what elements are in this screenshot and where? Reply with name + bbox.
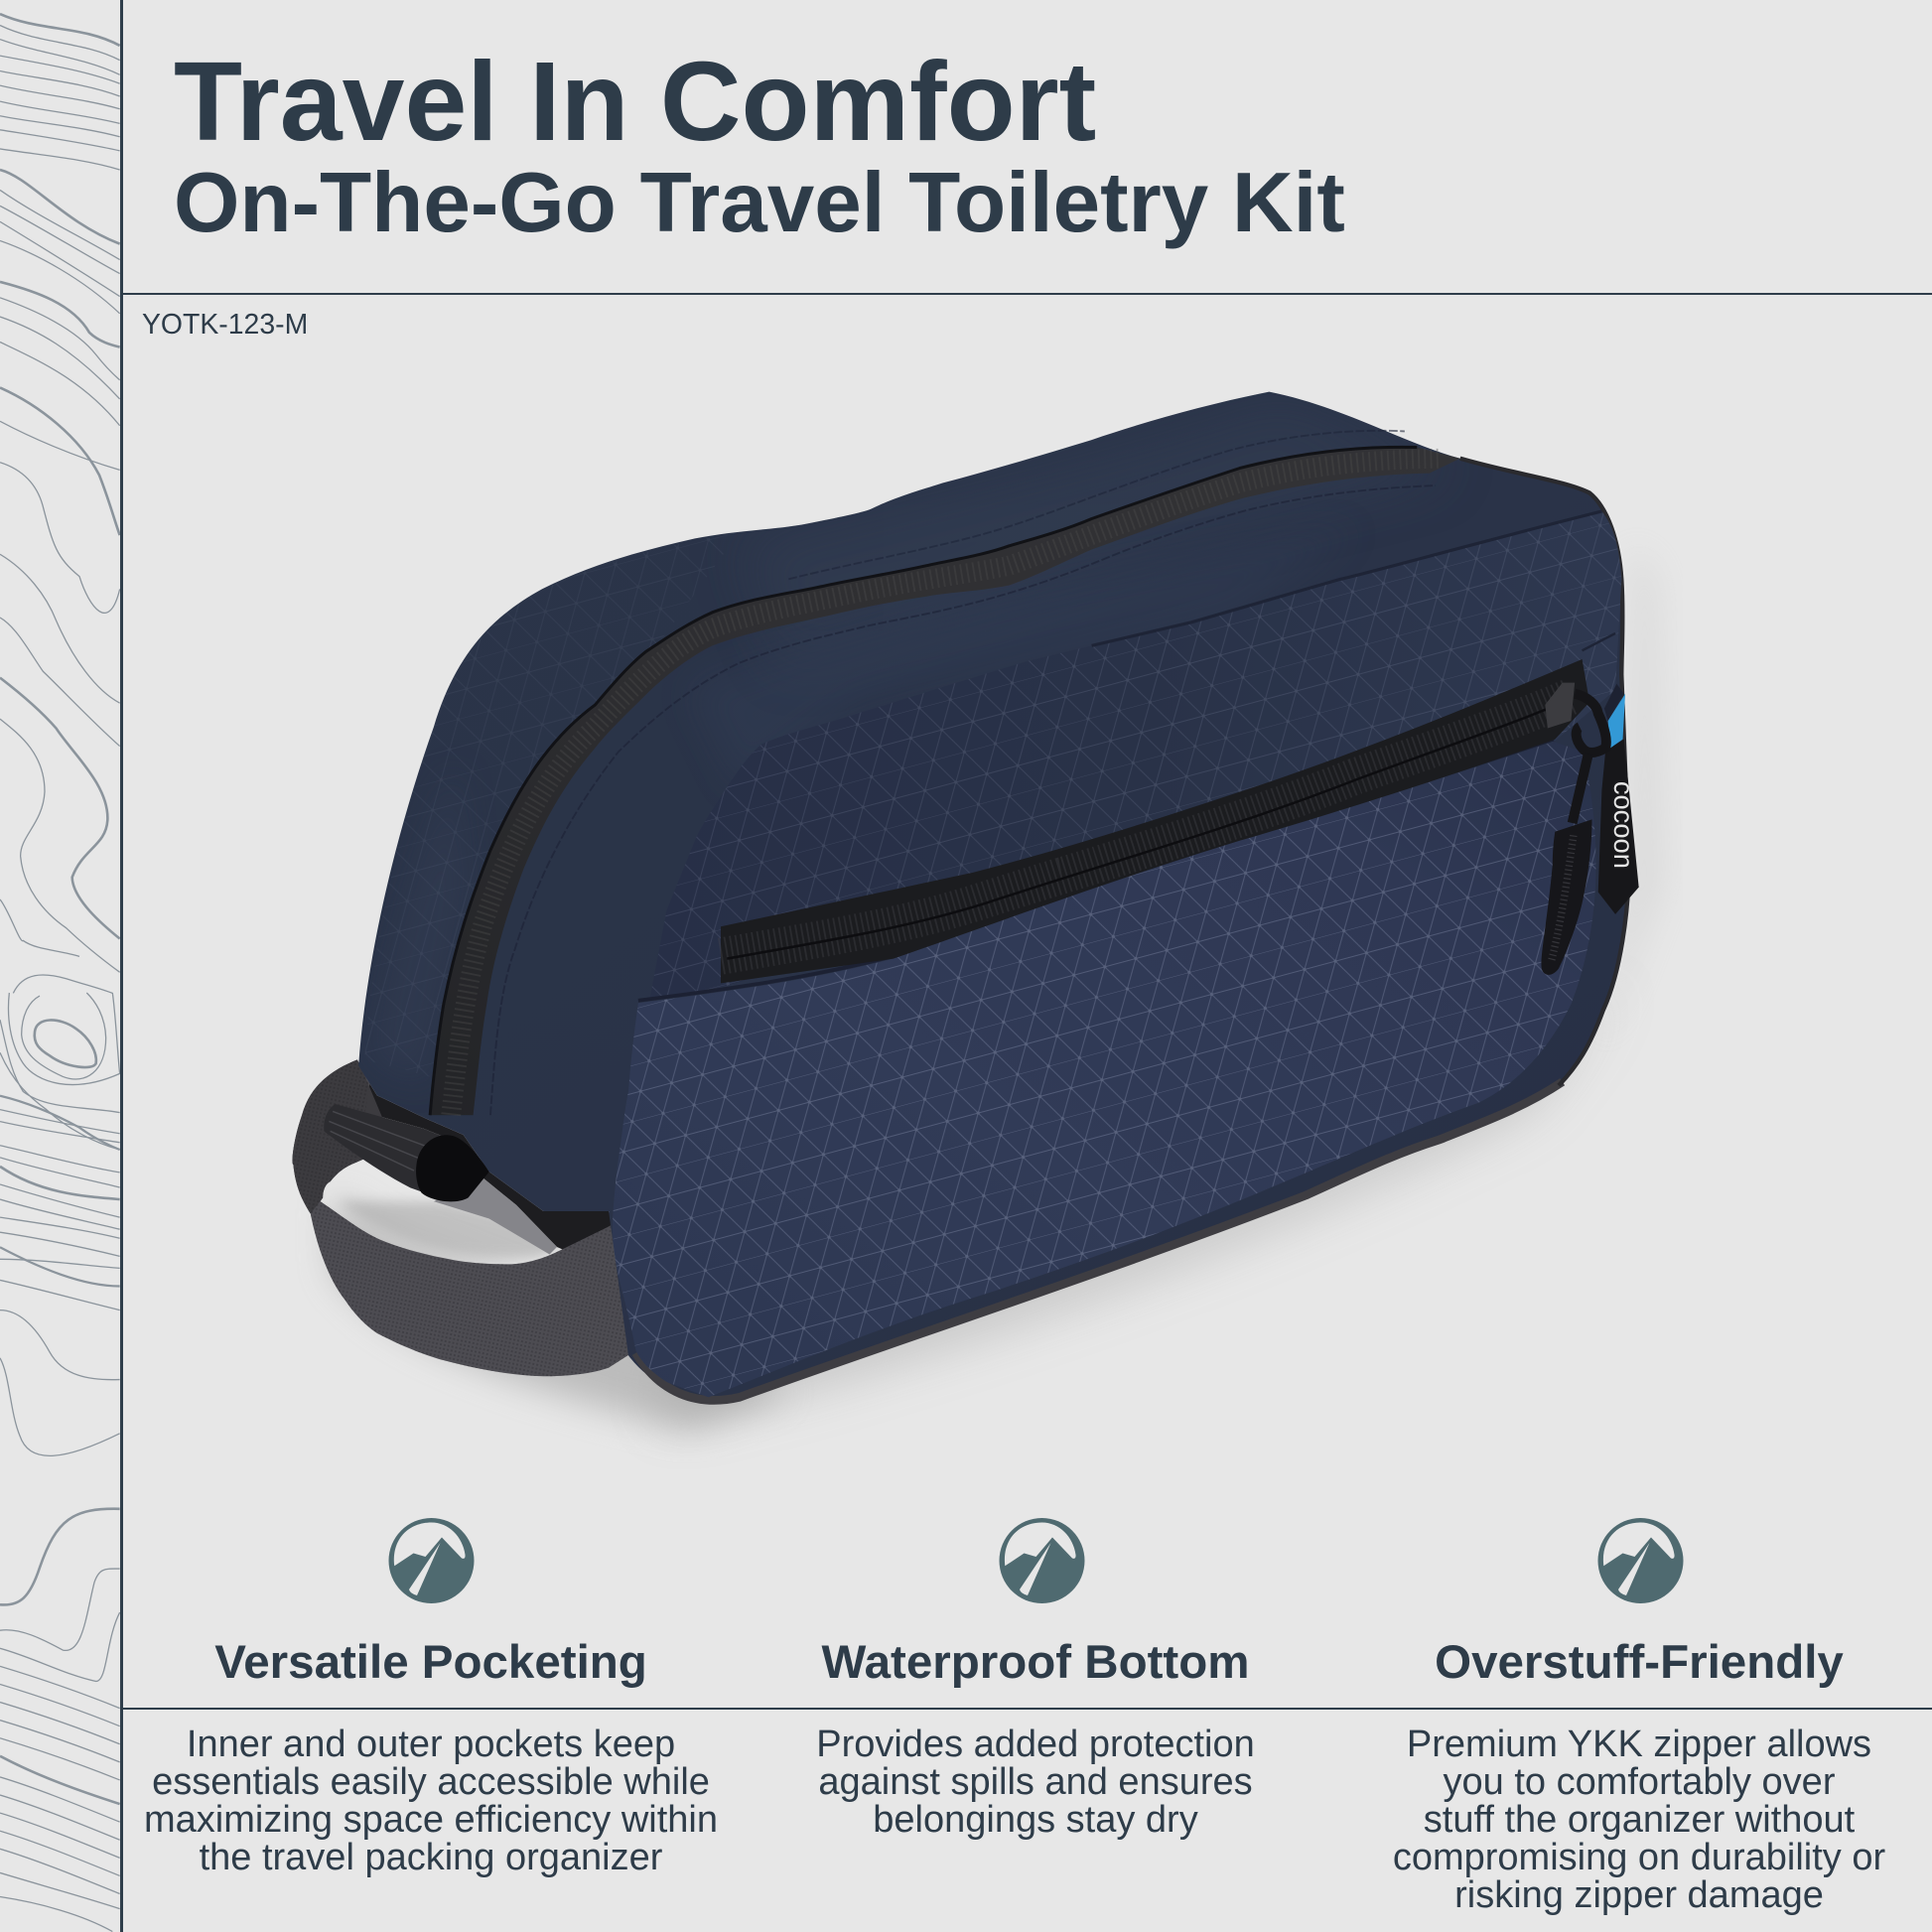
bag base edge [635, 1082, 1563, 1400]
vertical divider [120, 0, 123, 1932]
feature divider [121, 1708, 1932, 1710]
decorative topographic panel [0, 12, 120, 1932]
feature text: Versatile Pocketing: essentials easily accessible while [152, 1761, 710, 1803]
lower front pocket [613, 740, 1596, 1397]
handle underside [336, 1066, 613, 1254]
upper front panel [649, 511, 1621, 1001]
header divider [121, 293, 1932, 295]
main zipper [430, 431, 1460, 1115]
feature text: Waterproof Bottom: against spills and ensures [818, 1761, 1253, 1803]
feature text: Waterproof Bottom [816, 1724, 1255, 1841]
icon: mountain 1 [389, 1518, 475, 1603]
feature text: Versatile Pocketing: maximizing space efficiency within [144, 1799, 718, 1841]
feature text: Overstuff-Friendly [1393, 1724, 1885, 1916]
feature heading: Versatile Pocketing: Versatile Pocketing [214, 1636, 647, 1689]
feature text: Versatile Pocketing [144, 1724, 718, 1878]
feature text: Overstuff-Friendly: you to comfortably over [1444, 1761, 1835, 1803]
bag shadow [333, 542, 1663, 1430]
feature text: Overstuff-Friendly: Premium YKK zipper allows [1407, 1724, 1871, 1765]
feature heading: Overstuff-Friendly: Overstuff-Friendly [1435, 1636, 1844, 1689]
feature text: Overstuff-Friendly: stuff the organizer without [1424, 1799, 1855, 1841]
handle loop [292, 1059, 635, 1376]
feature heading: Waterproof Bottom: Waterproof Bottom [822, 1636, 1249, 1689]
brand tag: cocoon [1608, 781, 1639, 869]
handle webbing strap [324, 1104, 489, 1201]
zipper pull and cord [1541, 683, 1606, 975]
product photo: toiletry bag [292, 391, 1655, 1446]
top binding edge [1460, 459, 1629, 1085]
pocket zipper [721, 659, 1589, 983]
feature text: Versatile Pocketing: the travel packing organizer [200, 1837, 662, 1878]
feature text: Waterproof Bottom: belongings stay dry [873, 1799, 1198, 1841]
subtitle: On-The-Go Travel Toiletry Kit [174, 156, 1345, 250]
model number: YOTK-123-M [142, 309, 308, 341]
feature text: Versatile Pocketing: Inner and outer pockets keep [187, 1724, 675, 1765]
end panel ripstop texture [364, 532, 740, 1084]
icon: mountain 2 [999, 1518, 1084, 1603]
feature text: Waterproof Bottom: Provides added protection [816, 1724, 1255, 1765]
fabric shading [369, 394, 1453, 1084]
feature text: Overstuff-Friendly: risking zipper damage [1454, 1874, 1824, 1916]
bag body [358, 392, 1629, 1398]
title: Travel In Comfort [174, 39, 1096, 164]
brand tag [1598, 684, 1639, 914]
icon: mountain 3 [1598, 1518, 1684, 1603]
feature text: Overstuff-Friendly: compromising on durability or [1393, 1837, 1885, 1878]
